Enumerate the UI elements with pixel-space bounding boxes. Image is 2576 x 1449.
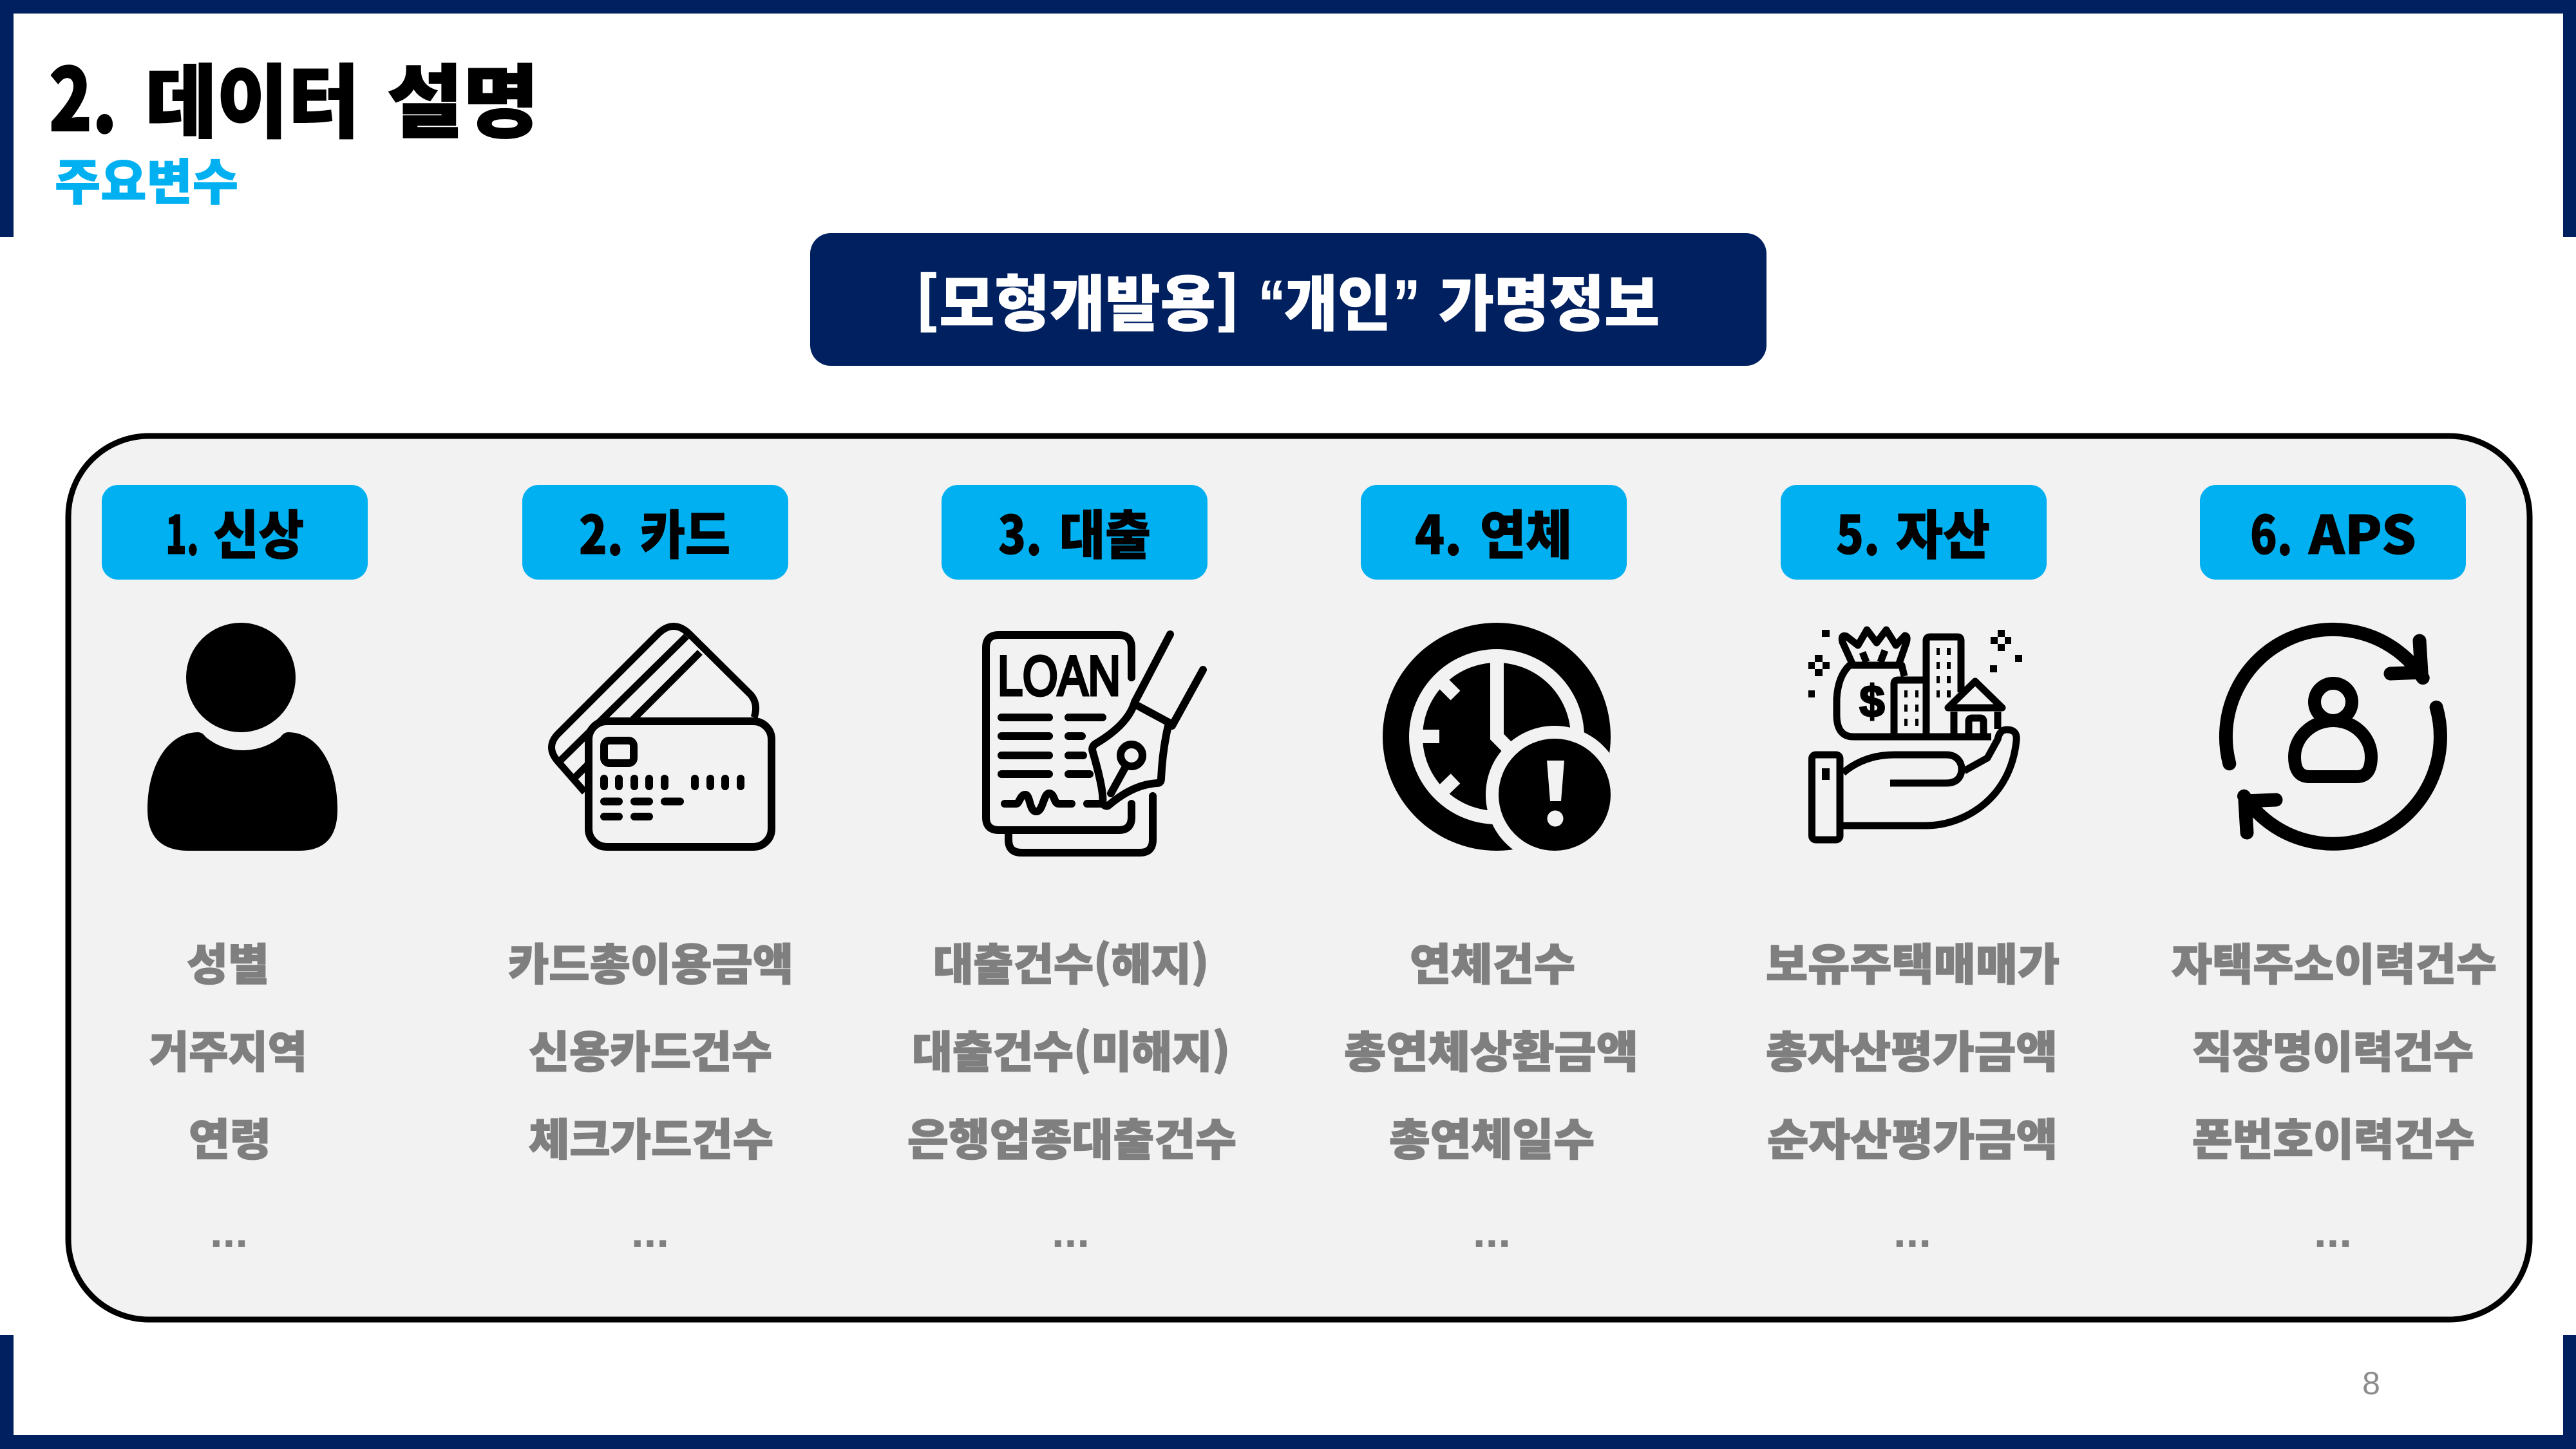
icon: loan document and pen: LOAN <box>998 645 1121 707</box>
list: delinquency variables: ... <box>1473 1208 1511 1256</box>
column 1: personal info <box>102 485 368 1256</box>
list: APS variables: 폰번호이력건수 <box>2192 1104 2475 1168</box>
chip: 6. APS <box>2200 485 2466 580</box>
list: personal variables: 연령 <box>189 1104 271 1168</box>
list: loan variables: 은행업종대출건수 <box>907 1104 1236 1168</box>
list: card variables: 체크가드건수 <box>529 1104 773 1168</box>
chip: 6. APS: APS <box>2308 493 2416 569</box>
chip: 2. 카드: 카드 <box>640 493 730 569</box>
page number: 8 <box>2362 1365 2380 1401</box>
column 6: APS <box>2172 485 2497 1256</box>
title: 데이터 <box>146 38 359 154</box>
list: APS variables: ... <box>2314 1208 2352 1256</box>
chip: 6. APS: 6. <box>2250 493 2293 569</box>
column 5: assets <box>1766 485 2060 1256</box>
title: 2. <box>49 31 117 156</box>
list: delinquency variables <box>1344 929 1638 1256</box>
list: loan variables: 대출건수(해지) <box>933 929 1209 993</box>
list: card variables: 카드총이용금액 <box>508 929 793 993</box>
chip: 4. 연체: 연체 <box>1480 493 1572 569</box>
list: delinquency variables: 총연체일수 <box>1389 1104 1595 1168</box>
list: loan variables <box>907 929 1236 1256</box>
list: asset variables <box>1766 929 2060 1256</box>
list: asset variables: 총자산평가금액 <box>1766 1017 2058 1081</box>
icon: overdue clock <box>1383 623 1624 864</box>
banner: dataset name <box>810 233 1766 366</box>
title: 설명 <box>387 38 539 154</box>
panel: variable categories <box>68 436 2530 1320</box>
banner: dataset name: ” <box>1393 267 1420 339</box>
banner: dataset name: 가명정보 <box>1439 256 1660 343</box>
chip: 3. 대출: 대출 <box>1059 493 1151 569</box>
list: personal variables: 거주지역 <box>149 1017 307 1081</box>
icon: assets on a hand <box>1808 630 2022 840</box>
chip: 1. 신상: 1. <box>166 493 199 569</box>
list: card variables: 신용카드건수 <box>529 1017 772 1081</box>
chip: 3. 대출 <box>942 485 1208 580</box>
column 3: loan <box>907 485 1236 1256</box>
chip: 5. 자산: 5. <box>1836 493 1880 569</box>
list: card variables: ... <box>631 1208 669 1256</box>
icon: rotating person <box>2226 629 2440 844</box>
list: asset variables: 순자산평가금액 <box>1767 1104 2058 1168</box>
chip: 5. 자산 <box>1781 485 2047 580</box>
subtitle: 주요변수 <box>55 143 238 214</box>
list: asset variables: 보유주택매매가 <box>1766 929 2060 993</box>
list: APS variables: 자택주소이력건수 <box>2172 929 2497 993</box>
banner: dataset name: 개인 <box>1284 256 1391 343</box>
icon: person <box>147 623 337 851</box>
list: APS variables: 직장명이력건수 <box>2192 1017 2474 1081</box>
icon: loan document and pen <box>986 634 1203 853</box>
icon: assets on a hand: $ <box>1860 676 1884 726</box>
chip: 1. 신상 <box>102 485 368 580</box>
banner: dataset name: [모형개발용] <box>915 256 1240 343</box>
list: delinquency variables: 총연체상환금액 <box>1344 1017 1638 1081</box>
chip: 1. 신상: 신상 <box>213 493 304 569</box>
column 2: card <box>508 485 793 1256</box>
column 4: delinquency <box>1344 485 1638 1256</box>
list: loan variables: ... <box>1052 1208 1090 1256</box>
list: card variables <box>508 929 793 1256</box>
chip: 4. 연체: 4. <box>1415 493 1462 569</box>
chip: 5. 자산: 자산 <box>1896 493 1990 569</box>
list: delinquency variables: 연체건수 <box>1410 929 1575 993</box>
list: APS variables <box>2172 929 2497 1256</box>
icon: credit cards <box>551 626 772 847</box>
chip: 4. 연체 <box>1361 485 1627 580</box>
list: personal variables: 성별 <box>187 929 269 993</box>
list: loan variables: 대출건수(미해지) <box>912 1017 1230 1081</box>
list: personal variables <box>149 929 307 1256</box>
list: personal variables: ... <box>210 1208 248 1256</box>
list: asset variables: ... <box>1893 1208 1931 1256</box>
chip: 3. 대출: 3. <box>998 493 1042 569</box>
chip: 2. 카드: 2. <box>579 493 623 569</box>
banner: dataset name: “ <box>1258 267 1285 339</box>
chip: 2. 카드 <box>522 485 788 580</box>
